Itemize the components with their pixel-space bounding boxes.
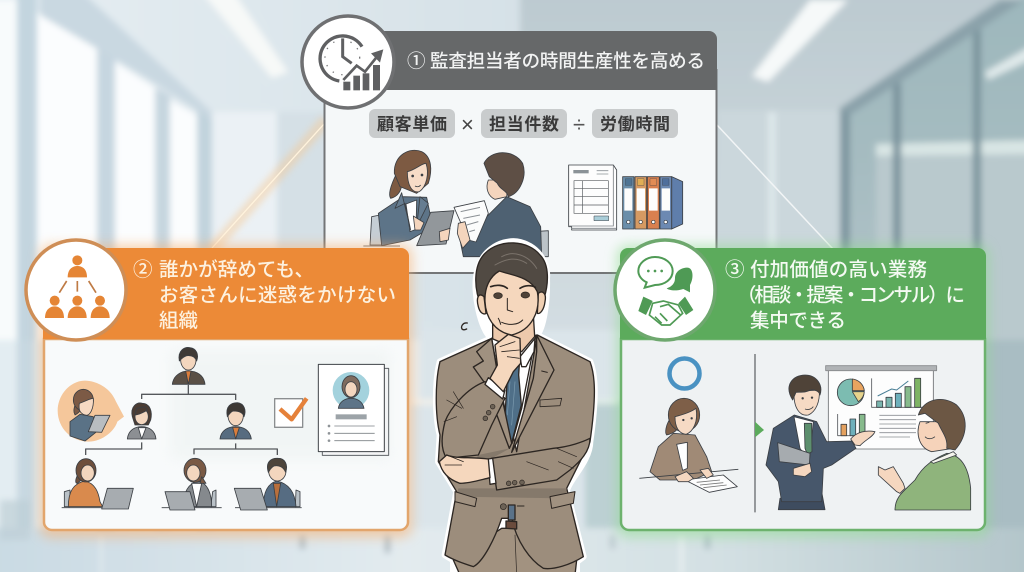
central figure: thinking businessman bbox=[436, 242, 594, 572]
face bbox=[485, 271, 538, 335]
panel 3 heading: ③ bbox=[725, 259, 745, 281]
panel 1 heading: 監査担当者の時間生産性を高める bbox=[430, 50, 705, 72]
panel 2: organisation bbox=[26, 240, 412, 537]
panel 3 body bbox=[621, 339, 985, 530]
second shirt cuff bbox=[488, 458, 496, 484]
panel 1 header bar bbox=[323, 31, 717, 90]
facial features bbox=[491, 285, 535, 288]
panel 2 body bbox=[44, 339, 408, 530]
presenter bbox=[766, 375, 875, 510]
checkbox bbox=[275, 398, 307, 427]
trousers bbox=[453, 528, 577, 572]
lapels bbox=[473, 338, 512, 448]
illustration: woman and man reviewing documents bbox=[363, 150, 683, 257]
elbow hand bbox=[439, 455, 490, 483]
client bbox=[878, 399, 971, 510]
icon: org hierarchy bbox=[26, 240, 126, 340]
shirt bbox=[492, 335, 536, 443]
panel 3 header bar bbox=[620, 248, 986, 339]
panel 3: high value work bbox=[615, 240, 989, 537]
presentation board bbox=[826, 366, 937, 449]
icon: chat bubbles and handshake bbox=[615, 240, 715, 340]
folded forearm bbox=[492, 438, 590, 490]
panel 2 glow bbox=[40, 245, 412, 537]
operator: divide: ÷ bbox=[573, 112, 585, 137]
panel 3 heading: 付加価値の高い業務 bbox=[750, 259, 927, 281]
panel 2 heading: 誰かが辞めても、 bbox=[159, 259, 314, 281]
jacket shading bbox=[457, 448, 567, 498]
divider with arrow bbox=[755, 354, 764, 512]
white connector line bbox=[717, 125, 833, 249]
formula pill: 労働時間 bbox=[592, 109, 678, 138]
panel 2 heading: 組織 bbox=[159, 310, 198, 332]
resume document bbox=[318, 364, 389, 455]
maru circle symbol bbox=[670, 358, 700, 388]
panel 3 heading: （相談・提案・コンサル）に bbox=[737, 284, 965, 306]
formula pill: 顧客単価: 顧客単価 bbox=[377, 114, 447, 134]
staff with laptop: orange jacket bbox=[62, 459, 133, 509]
org chart with staff bbox=[58, 347, 389, 510]
formula pill: 担当件数 bbox=[481, 109, 567, 138]
panel 1: time productivity bbox=[302, 16, 717, 273]
illustration: woman doing paperwork bbox=[639, 398, 738, 492]
panel 1 body bbox=[324, 70, 716, 273]
jacket bbox=[436, 335, 594, 569]
neck bbox=[493, 315, 535, 362]
ears bbox=[477, 292, 545, 314]
panel 3 glow bbox=[617, 245, 989, 537]
shirt cuff bbox=[485, 378, 505, 399]
panel 2 faint background tint bbox=[170, 350, 390, 460]
icon: clock with rising chart bbox=[302, 16, 394, 108]
raised forearm bbox=[442, 382, 505, 458]
orange connector glow line bbox=[212, 120, 326, 250]
formula pill: 顧客単価 bbox=[369, 109, 455, 138]
speech bubble with woman and tablet bbox=[58, 381, 124, 442]
panel 1 heading: ① bbox=[407, 50, 426, 72]
hair bbox=[476, 243, 547, 307]
panel 3 heading: 集中できる bbox=[750, 310, 846, 332]
formula pill: 担当件数: 担当件数 bbox=[489, 115, 559, 134]
operator: multiply: × bbox=[461, 112, 474, 137]
thinking hand bbox=[490, 334, 521, 392]
middle manager right bbox=[220, 403, 251, 439]
thought squiggle bbox=[462, 323, 467, 330]
panel 2 heading: ② bbox=[133, 259, 153, 281]
formula pill: 労働時間: 労働時間 bbox=[600, 115, 670, 134]
top manager bbox=[172, 347, 205, 384]
staff with laptop: navy jacket bbox=[234, 458, 302, 510]
staff with laptop: grey jacket bbox=[162, 458, 222, 510]
necktie bbox=[505, 364, 521, 443]
illustration: presenter, chart board and client bbox=[766, 366, 971, 510]
middle manager left bbox=[127, 403, 156, 439]
pocket flaps and button bbox=[455, 492, 477, 507]
panel 2 heading: お客さんに迷惑をかけない bbox=[159, 284, 396, 306]
figure white halo bbox=[436, 242, 594, 572]
panel 2 header bar bbox=[43, 248, 409, 339]
